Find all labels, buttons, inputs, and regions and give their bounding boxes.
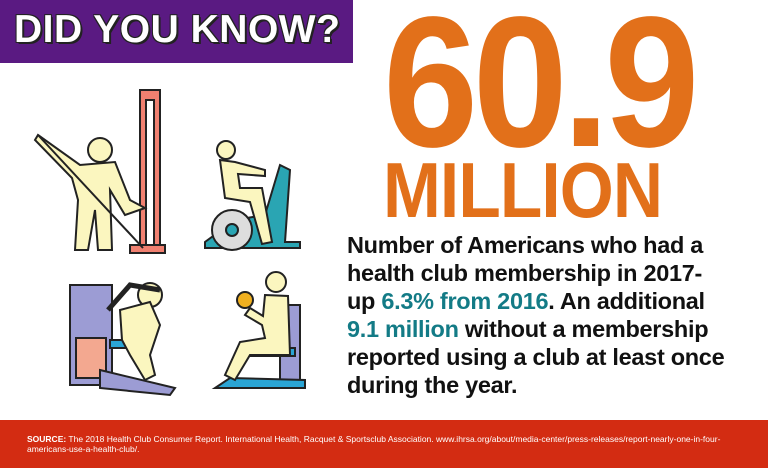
description text: reported using a club at least once bbox=[347, 344, 724, 370]
description text: health club membership in 2017- bbox=[347, 260, 702, 286]
description text: 9.1 million without a membership bbox=[347, 316, 708, 342]
title text: DID YOU KNOW? bbox=[14, 8, 340, 51]
description text: during the year. bbox=[347, 372, 517, 398]
icon: cable machine bbox=[35, 90, 165, 253]
footer source bar bbox=[0, 420, 768, 468]
description text bbox=[347, 232, 724, 398]
title banner bbox=[0, 0, 353, 63]
description text: up 6.3% from 2016. An additional bbox=[347, 288, 705, 314]
description text: Number of Americans who had a bbox=[347, 232, 703, 258]
icon: exercise bike bbox=[205, 141, 300, 250]
source text: SOURCE: The 2018 Health Club Consumer Report. International Health, Racquet & Sportsclub Association. www.ihrsa.org/about/media-center/press-releases/report-nearly-one-in-four-americans-use-a-health-club/. bbox=[27, 434, 720, 454]
icon: lat machine bbox=[70, 283, 175, 395]
million label: MILLION bbox=[383, 146, 662, 234]
icon: dumbbell seated bbox=[215, 272, 305, 388]
icons: gym figures bbox=[34, 89, 306, 396]
